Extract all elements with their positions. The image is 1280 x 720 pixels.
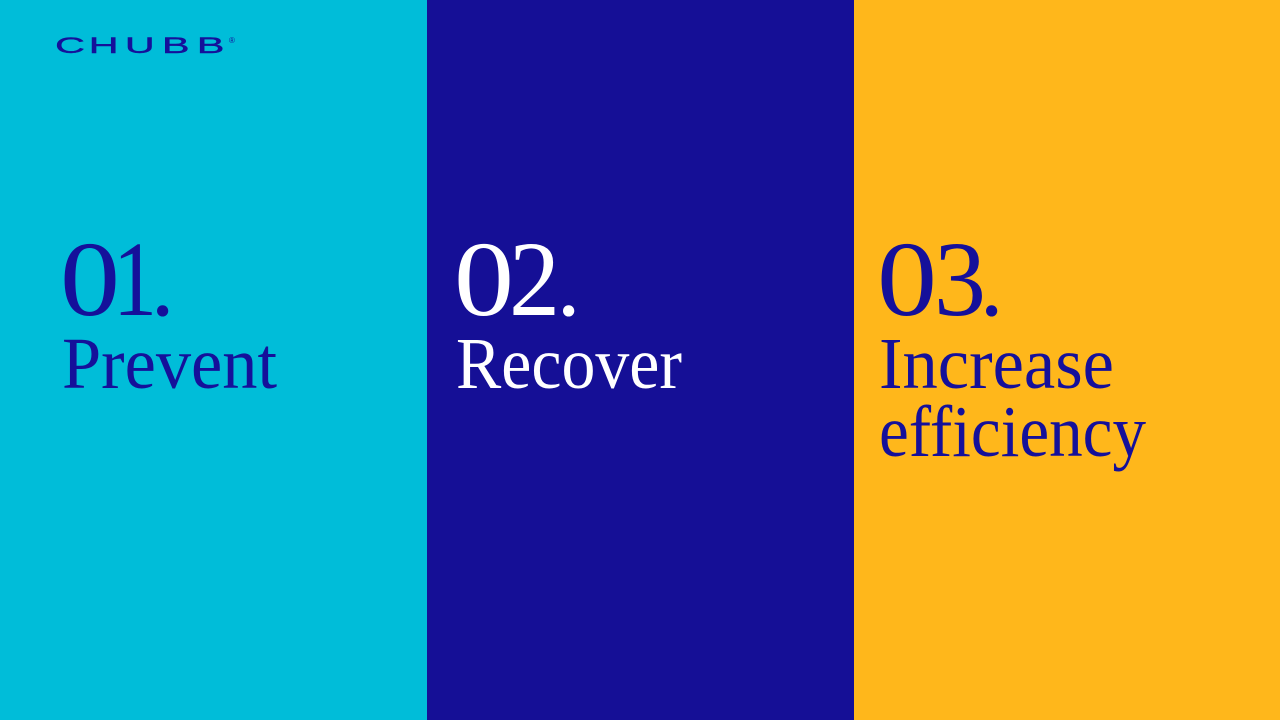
number: 02	[454, 221, 580, 339]
panel: prevent	[0, 0, 427, 720]
number: 03	[877, 221, 1003, 339]
number: 03: 0	[877, 221, 937, 339]
logo: Chubb: CHUBB	[55, 33, 224, 58]
panel: increase efficiency	[854, 0, 1280, 720]
number: 01: 0	[60, 221, 120, 339]
heading: Increase efficiency: Increase	[879, 323, 1114, 404]
number: 03: .	[980, 230, 1003, 336]
number: 02: .	[557, 230, 580, 336]
logo: Chubb: ®	[229, 36, 235, 45]
number: 01: .	[151, 230, 174, 336]
heading: Prevent: Prevent	[62, 323, 277, 404]
number: 02: 2	[509, 221, 560, 339]
number: 01	[60, 221, 174, 339]
heading: Increase efficiency: efficiency	[879, 391, 1146, 472]
number: 01: 1	[113, 221, 157, 339]
panel: recover	[427, 0, 854, 720]
number: 03: 3	[934, 221, 986, 339]
heading: Increase efficiency	[879, 323, 1146, 472]
heading: Recover: Recover	[456, 323, 682, 404]
number: 02: 0	[454, 221, 514, 339]
